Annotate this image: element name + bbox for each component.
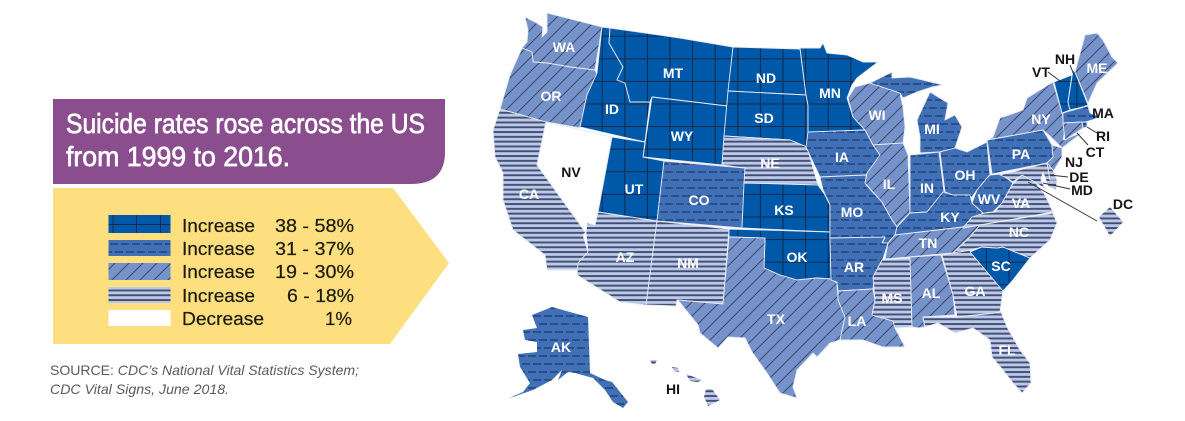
- state: CA: [493, 109, 598, 270]
- source note: CDC Vital Signs, June 2018.: [50, 381, 229, 397]
- state: OR: [500, 48, 597, 128]
- small-state labels: HI: [666, 381, 680, 397]
- title banner: from 1999 to 2016.: [66, 141, 290, 172]
- state: AZ: AZ: [616, 249, 635, 265]
- state: NJ: [1047, 145, 1062, 172]
- state: AK: [507, 307, 628, 408]
- small-state labels: MA: [1092, 105, 1114, 121]
- state: TX: [678, 237, 845, 398]
- state: SD: SD: [754, 110, 774, 126]
- legend row: 19-30%: Increase: [182, 262, 255, 282]
- legend row: 19-30%: [108, 262, 354, 282]
- state: WI: [848, 83, 905, 145]
- small-state labels: [666, 51, 1133, 397]
- state: IN: [910, 152, 944, 213]
- state: MT: [609, 28, 733, 106]
- legend row: 38-58%: [108, 215, 354, 236]
- state: NC: NC: [1009, 224, 1029, 240]
- state: CO: [657, 161, 745, 228]
- state: WA: WA: [553, 39, 575, 55]
- legend row: 6-18%: Increase: [182, 286, 255, 306]
- state: MT: MT: [663, 65, 684, 81]
- state: FL: FL: [998, 342, 1016, 358]
- state: NV: [537, 122, 612, 233]
- small-state labels: DC: [1113, 196, 1133, 212]
- state: PA: PA: [1012, 146, 1030, 162]
- title banner: [53, 99, 445, 184]
- state: ID: ID: [605, 101, 619, 117]
- state: CT: [1063, 122, 1083, 140]
- state: MO: MO: [841, 204, 863, 220]
- state: AL: AL: [922, 285, 941, 301]
- state: KY: [895, 192, 983, 235]
- state: DE: [1047, 163, 1057, 180]
- state: IA: [806, 130, 880, 177]
- state: CO: CO: [688, 192, 710, 208]
- legend row: 19-30%: 19 - 30%: [275, 262, 354, 282]
- state: NC: [953, 213, 1057, 258]
- state: ND: ND: [756, 70, 776, 86]
- legend row: 38-58%: Increase: [182, 216, 255, 236]
- state: MS: MS: [882, 290, 902, 306]
- state: RI: [1082, 122, 1087, 128]
- small-state labels: VT: [1032, 64, 1050, 80]
- state: HI: [650, 360, 720, 406]
- state: MI: [917, 92, 962, 153]
- small-state labels: NH: [1055, 51, 1075, 67]
- source note: [50, 362, 359, 397]
- state: WY: [643, 97, 727, 165]
- legend row: 31-37%: 31 - 37%: [275, 239, 354, 259]
- leader lines for small states: [1028, 65, 1097, 221]
- state: AK: AK: [551, 339, 571, 355]
- title banner: Suicide rates rose across the US: [66, 108, 425, 139]
- source note: SOURCE: CDC’s National Vital Statistics System;: [50, 362, 359, 378]
- state: MO: [820, 175, 897, 243]
- state: IN: IN: [920, 180, 934, 196]
- state: GA: [942, 250, 1003, 317]
- state: ND: [728, 47, 806, 95]
- state: CA: CA: [519, 186, 539, 202]
- state: WV: [972, 173, 1013, 213]
- state: NM: [646, 221, 729, 306]
- state: IL: [865, 143, 910, 227]
- state: UT: UT: [625, 181, 644, 197]
- legend row: 6-18%: [108, 286, 354, 306]
- state: AR: AR: [844, 259, 864, 275]
- state: UT: [598, 137, 664, 221]
- legend row: 31-37%: Increase: [182, 239, 255, 259]
- state: KY: KY: [940, 209, 960, 225]
- state: OH: OH: [954, 167, 976, 183]
- state: NH: [1068, 70, 1088, 110]
- state: KS: KS: [774, 202, 794, 218]
- state: NE: [722, 136, 818, 185]
- state: NY: NY: [1031, 111, 1051, 127]
- state: IA: IA: [835, 149, 849, 165]
- state: ME: [1075, 33, 1118, 103]
- state: WA: [522, 13, 602, 70]
- state: NV: NV: [561, 164, 581, 180]
- state: WI: WI: [868, 107, 886, 123]
- state: ID: [580, 27, 650, 142]
- state: LA: LA: [848, 313, 866, 329]
- state: SD: [724, 91, 808, 147]
- state: LA: [838, 289, 905, 347]
- state: NY: [987, 82, 1083, 148]
- small-state labels: RI: [1096, 128, 1110, 144]
- legend row: 6-18%: 6 - 18%: [287, 286, 354, 306]
- state: PA: [987, 130, 1053, 174]
- state: TX: TX: [767, 311, 786, 327]
- state: NE: NE: [760, 155, 780, 171]
- state: VT: [1054, 75, 1072, 113]
- state: DC inset: [1099, 207, 1123, 236]
- state: VA: [963, 175, 1053, 228]
- state: OR: OR: [540, 88, 562, 104]
- state: IL: IL: [883, 176, 896, 192]
- legend row: 31-37%: [108, 239, 354, 259]
- state: TN: [885, 225, 980, 259]
- state: VA: VA: [1012, 195, 1030, 211]
- state: OH: [940, 142, 990, 197]
- state: OK: OK: [786, 249, 808, 265]
- state: MN: MN: [819, 85, 841, 101]
- small-state labels: MD: [1071, 182, 1093, 198]
- state: AZ: [577, 212, 657, 305]
- state: MN: [800, 43, 878, 132]
- state: AL: [910, 255, 955, 328]
- legend row: decrease 1%: Decrease: [182, 309, 264, 329]
- state: AR: [830, 237, 888, 291]
- state: MI: MI: [924, 121, 940, 137]
- state: FL: [923, 312, 1031, 393]
- state: KS: [742, 183, 830, 232]
- state: TN: TN: [919, 235, 937, 251]
- small-state labels: NJ: [1065, 154, 1083, 170]
- legend row: 38-58%: 38 - 58%: [275, 216, 354, 236]
- state: MI upper: [870, 72, 943, 98]
- state: WV: WV: [978, 191, 1001, 207]
- state: WY: WY: [671, 128, 694, 144]
- small-state labels: DE: [1069, 169, 1089, 185]
- state: GA: GA: [964, 283, 986, 299]
- legend row: decrease 1%: [108, 309, 352, 329]
- legend panel: [53, 188, 449, 344]
- state: MA: [1063, 106, 1100, 123]
- small-state labels: CT: [1086, 144, 1105, 160]
- state: ME: ME: [1086, 60, 1108, 76]
- state: NM: NM: [677, 255, 699, 271]
- state: OK: [729, 229, 831, 280]
- state: SC: [970, 247, 1030, 291]
- state: MD: [1000, 163, 1057, 190]
- legend row: decrease 1%: 1%: [325, 309, 352, 329]
- state: MS: [872, 258, 912, 328]
- map: US states: [493, 13, 1123, 408]
- state: SC: SC: [991, 258, 1011, 274]
